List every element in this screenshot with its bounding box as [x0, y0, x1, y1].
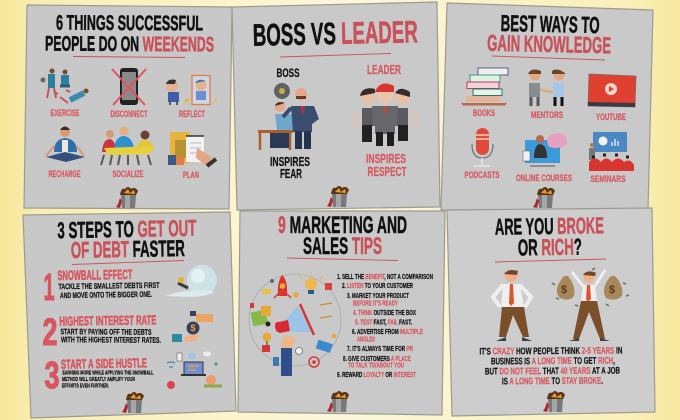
- label: exercise: EXERCISE: [50, 108, 80, 119]
- icon: disconnect phone: [112, 68, 146, 105]
- title: 9 MARKETING AND: [278, 212, 407, 239]
- tip 1: 1. SELL THE BENEFIT, NOT A COMPARISON: [337, 272, 433, 281]
- label: youtube: YOUTUBE: [596, 112, 626, 123]
- label: inspires respect: INSPIRES: [366, 151, 406, 166]
- icon: money bag and card: $: [190, 323, 196, 333]
- tip 3: [347, 291, 409, 308]
- step 3: start a side hustle: EARNING MORE WHILE APPLYING THE SNOWBALL: [62, 370, 154, 376]
- title: [278, 212, 407, 260]
- illustration: leader with team: [356, 84, 416, 146]
- label: inspires fear: FEAR: [280, 167, 302, 181]
- title: BOSS VS LEADER: [252, 14, 418, 53]
- label: recharge: RECHARGE: [48, 169, 80, 180]
- label: seminars: SEMINARS: [590, 174, 626, 185]
- tip 7: 7. IT'S ALWAYS TIME FOR PR: [347, 344, 413, 353]
- tip 6: ANGLES: [357, 334, 375, 344]
- icon: laptop and hustle ideas: [167, 352, 222, 389]
- title: ARE YOU BROKE: [495, 212, 604, 240]
- label: leader: LEADER: [367, 62, 401, 77]
- step 3: start a side hustle: [44, 355, 154, 397]
- label: mentors: MENTORS: [531, 110, 563, 121]
- icon: snowball: [166, 265, 217, 297]
- tips list: [337, 272, 433, 379]
- panel: are you broke or rich: [447, 208, 655, 416]
- title: BEST WAYS TO: [500, 10, 600, 38]
- icon: bucket logo: [116, 187, 138, 208]
- icon: mentors: [528, 70, 566, 106]
- title: [495, 212, 604, 260]
- label: inspires respect: RESPECT: [368, 164, 407, 179]
- step 3: start a side hustle: EFFORTS EVEN FURTHER.: [62, 384, 109, 390]
- icon: bucket logo: [533, 187, 555, 208]
- step 3: start a side hustle: METHOD WILL GREATLY AMPLIFY YOUR: [62, 377, 135, 383]
- title: SALES TIPS: [303, 233, 382, 260]
- label: socialize: SOCIALIZE: [112, 169, 144, 180]
- title: PEOPLE DO ON WEEKENDS: [45, 33, 214, 56]
- icon: books: [461, 68, 508, 106]
- step 1: snowball effect: SNOWBALL EFFECT: [57, 267, 133, 283]
- label: inspires respect: [366, 151, 407, 179]
- icon: youtube player: [588, 74, 636, 107]
- title: [45, 12, 214, 56]
- illustration: rich man with money bags: $: [561, 284, 567, 296]
- label: online courses: ONLINE COURSES: [516, 173, 572, 184]
- panel: boss vs leader: [232, 2, 440, 210]
- step 2: highest interest rate: START BY PAYING OFF THE DEBTS: [60, 327, 152, 337]
- title: OF DEBT FASTER: [71, 235, 185, 263]
- tip 6: 6. ADVERTISE FROM MULTIPLE: [352, 327, 423, 336]
- icon: reflect: [166, 76, 218, 105]
- panel: 9 marketing and sales tips: [238, 211, 445, 415]
- icon: money bag and card: [172, 311, 213, 342]
- label: plan: PLAN: [183, 170, 199, 181]
- icon: plan papers: [168, 132, 216, 166]
- label: disconnect: DISCONNECT: [110, 109, 148, 120]
- title: [57, 215, 197, 263]
- illustration: broke man: [493, 270, 532, 341]
- title: 3 STEPS TO GET OUT: [57, 215, 197, 243]
- panel: 3 steps to get out of debt faster: [23, 212, 236, 418]
- step 2: highest interest rate: [42, 312, 161, 354]
- step 1: snowball effect: TACKLE THE SMALLEST DEBTS FIRST: [58, 281, 160, 291]
- label: inspires fear: INSPIRES: [270, 155, 310, 169]
- illustration: marketing circle with megaphone: [249, 272, 341, 376]
- label: reflect: REFLECT: [179, 109, 205, 120]
- title: 6 THINGS SUCCESSFUL: [56, 12, 203, 35]
- icon: exercise: [40, 68, 88, 103]
- icon: bucket logo: [327, 186, 349, 207]
- label: podcasts: PODCASTS: [464, 170, 500, 181]
- title: OR RICH?: [518, 234, 582, 260]
- step 1: snowball effect: 1: [44, 267, 54, 309]
- illustration: rich man with money bags: [552, 268, 629, 341]
- step 3: start a side hustle: START A SIDE HUSTLE: [61, 355, 147, 372]
- tip 6: [352, 327, 423, 344]
- icon: bucket logo: [543, 391, 565, 412]
- tip 8: [343, 354, 411, 370]
- step 2: highest interest rate: HIGHEST INTEREST RATE: [59, 312, 157, 329]
- step 3: start a side hustle: 3: [44, 355, 60, 397]
- tip 8: 8. GIVE CUSTOMERS A PLACE: [343, 354, 411, 363]
- icon: online courses: [523, 133, 567, 166]
- quote text: BUT DO NOT FEEL THAT 40 YEARS AT A JOB: [485, 366, 620, 377]
- title: [487, 10, 611, 58]
- tip 4: 4. THINK OUTSIDE THE BOX: [353, 308, 416, 317]
- tip 8: TO TALK TO/ABOUT YOU: [348, 360, 404, 370]
- step 1: snowball effect: [44, 267, 160, 309]
- step 2: highest interest rate: WITH THE HIGHEST INTEREST RATES.: [61, 335, 161, 345]
- quote text: [479, 346, 623, 387]
- step 1: snowball effect: AND MOVE ONTO THE BIGGER ONE.: [60, 290, 152, 300]
- quote text: BUSINESS IS A LONG TIME TO GET RICH,: [491, 356, 615, 367]
- icon: podcast microphone: [472, 128, 493, 166]
- panel: 6 things successful people do on weekends: [24, 5, 232, 209]
- step 2: highest interest rate: 2: [42, 312, 58, 354]
- tip 2: 2. LISTEN TO YOUR CUSTOMER: [342, 281, 413, 290]
- icon: bucket logo: [327, 391, 349, 412]
- tip 9: 9. REWARD LOYALTY OR INTEREST: [337, 370, 416, 379]
- label: inspires fear: [270, 155, 310, 181]
- tip 3: 3. MARKET YOUR PRODUCT: [347, 291, 409, 300]
- label: books: BOOKS: [473, 108, 495, 119]
- quote text: IT'S CRAZY HOW PEOPLE THINK 2-5 YEARS IN: [479, 346, 623, 357]
- panel: best ways to gain knowledge: [441, 3, 653, 210]
- icon: socialize table: [101, 126, 155, 165]
- icon: seminars: [589, 132, 634, 171]
- illustration: rich man with money bags: $: [609, 284, 615, 296]
- tip 3: BEFORE IT'S READY: [353, 298, 398, 308]
- icon: bucket logo: [122, 392, 144, 413]
- illustration: boss scolding employee: [258, 83, 319, 150]
- tip 5: 5. TEST FAST, FAIL FAST.: [355, 318, 412, 326]
- icon: recharge meditation: [46, 126, 85, 162]
- quote text: IS A LONG TIME TO STAY BROKE.: [502, 376, 603, 387]
- label: boss: BOSS: [276, 66, 300, 80]
